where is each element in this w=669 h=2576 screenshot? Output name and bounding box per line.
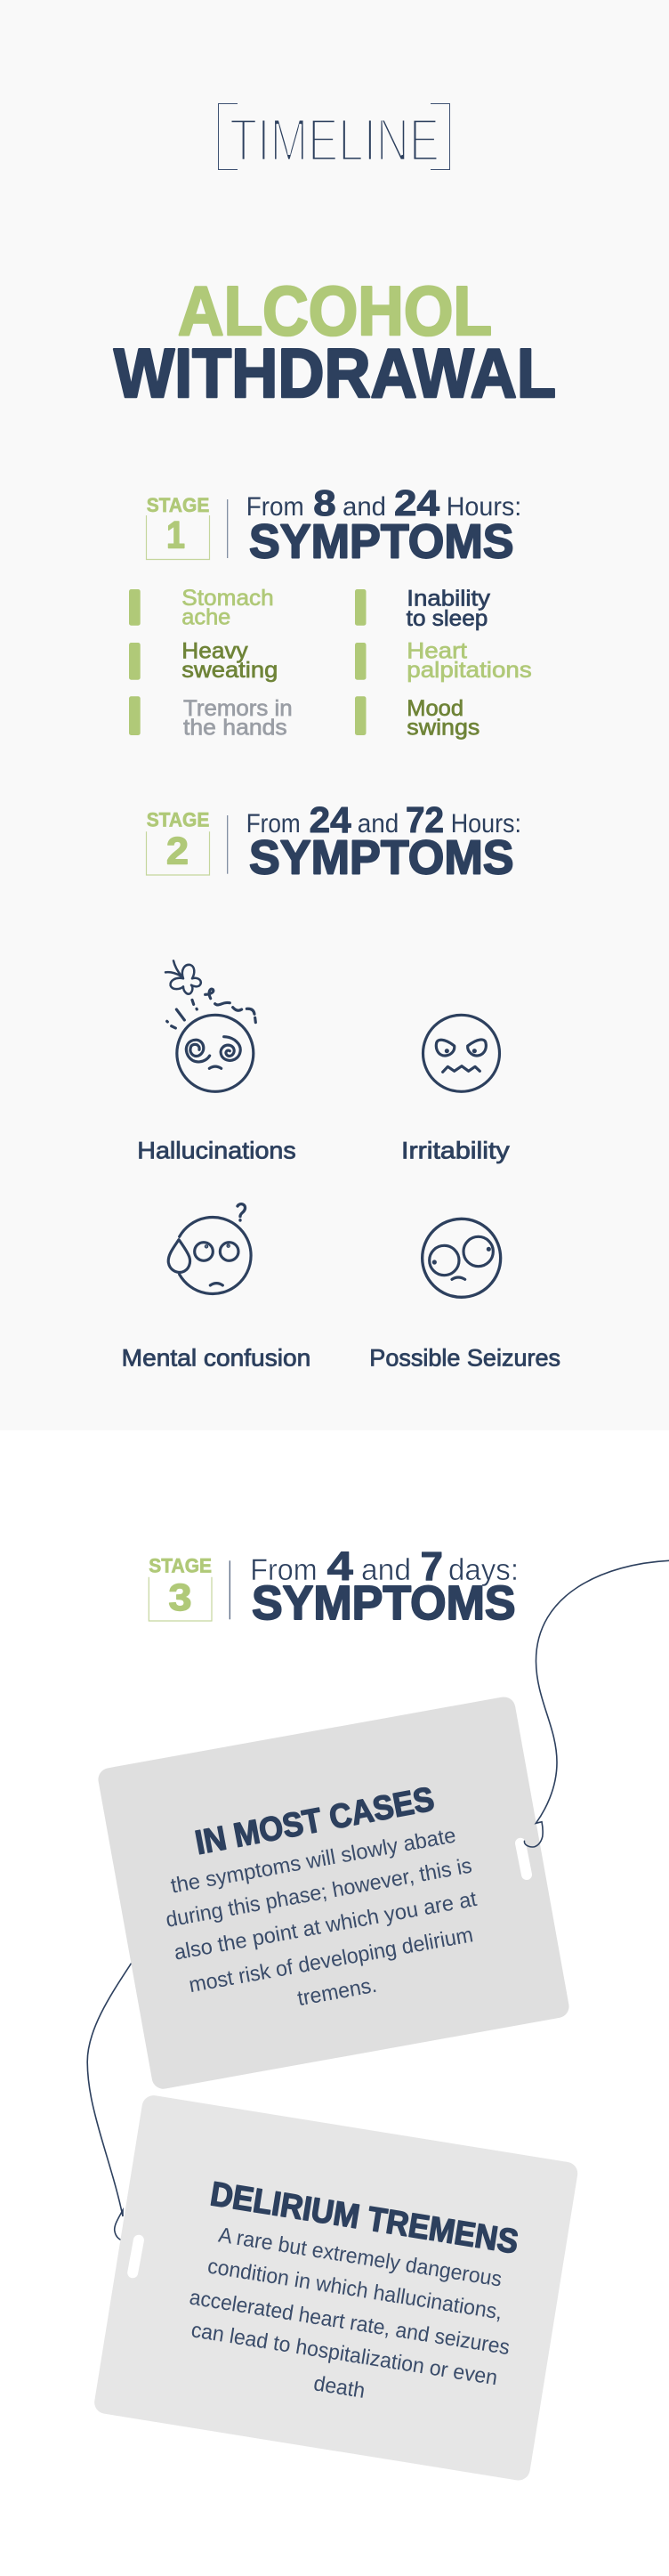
title: WITHDRAWAL — [114, 334, 556, 412]
panel: in most cases card: IN MOST CASES — [192, 1780, 437, 1862]
wire to card 2 — [87, 1964, 135, 2242]
stage 1 symptom list: sweating — [181, 658, 278, 683]
title — [114, 271, 556, 412]
stage 1 header: and — [343, 492, 386, 522]
panel: in most cases card: the symptoms will slowly abate — [169, 1823, 458, 1899]
stage 2 header: 24 — [310, 799, 351, 840]
stage 2 header: SYMPTOMS — [249, 831, 514, 885]
label: irritability: Irritability — [401, 1138, 510, 1164]
stage 3 header: STAGE — [149, 1555, 212, 1577]
stage 1 symptom list: swings — [407, 716, 480, 741]
stage 1 header: SYMPTOMS — [249, 514, 514, 568]
stage 1 header: 1 — [166, 514, 185, 557]
stage 1 symptom list: the hands — [183, 715, 287, 740]
panel: delirium tremens card: condition in which hallucinations, — [206, 2255, 504, 2325]
stage 3 header: From — [250, 1553, 318, 1587]
wire to card 1 — [524, 1560, 669, 1847]
stage 1 symptom list: Mood — [407, 696, 463, 721]
stage 1 header: From — [246, 492, 304, 522]
label: mental confusion: Mental confusion — [122, 1344, 310, 1371]
stage 3 header: 4 — [327, 1543, 353, 1589]
icon: mental confusion face — [168, 1204, 251, 1293]
icon: hallucinations face — [165, 960, 255, 1091]
stage 2 header: STAGE — [147, 809, 209, 831]
stage 1 symptom list: ache — [181, 605, 230, 630]
panel: delirium tremens card: A rare but extremely dangerous — [217, 2224, 504, 2292]
stage 1 symptom list: Inability — [407, 587, 491, 612]
stage 3 header: and — [361, 1553, 411, 1587]
panel: delirium tremens card: death — [312, 2371, 367, 2403]
stage 1 header — [146, 482, 521, 568]
stage 1 symptom list: to sleep — [407, 606, 488, 631]
stage 1 header: 8 — [313, 482, 336, 523]
stage 1 symptom list: Tremors in — [183, 696, 293, 721]
stage 1 symptom list: Heart — [407, 638, 467, 663]
stage 2 header: From — [246, 809, 301, 838]
label: possible seizures: Possible Seizures — [369, 1344, 560, 1371]
stage 3 header: days: — [448, 1553, 519, 1587]
panel: in most cases card: during this phase; however, this is — [164, 1854, 474, 1932]
stage 2 header — [146, 799, 521, 885]
timeline label with brackets: TIMELINE — [230, 107, 439, 174]
panel: delirium tremens card: accelerated heart rate, and seizures — [188, 2286, 512, 2360]
stage 1 header: Hours: — [447, 492, 521, 522]
icon: possible seizures face — [423, 1219, 501, 1297]
stage 2 header: 72 — [406, 799, 444, 840]
stage 2 header: Hours: — [451, 809, 521, 838]
panel: in most cases card: tremens. — [295, 1973, 379, 2011]
panel: delirium tremens card: can lead to hospitalization or even — [189, 2318, 499, 2390]
stage 2 header: and — [358, 809, 399, 838]
stage 3 header: 3 — [169, 1576, 192, 1619]
panel: in most cases card — [96, 1695, 571, 2091]
stage 3 header — [149, 1543, 519, 1630]
stage 1 symptom list: Stomach — [181, 586, 274, 611]
stage 1 symptom list: Heavy — [181, 638, 248, 663]
panel: in most cases card: also the point at which you are at — [173, 1887, 479, 1965]
panel: delirium tremens card: DELIRIUM TREMENS — [208, 2175, 520, 2262]
panel: delirium tremens card — [93, 2094, 579, 2482]
title: ALCOHOL — [178, 271, 492, 350]
label: hallucinations: Hallucinations — [137, 1138, 296, 1164]
stage 1 header: STAGE — [147, 494, 209, 516]
stage 1 symptom list — [129, 586, 532, 741]
stage 1 symptom list: palpitations — [407, 658, 532, 683]
stage 1 header: 24 — [394, 482, 439, 523]
panel: in most cases card: most risk of developing delirium — [187, 1923, 475, 1997]
stage 3 header: SYMPTOMS — [252, 1576, 516, 1630]
icon: irritability face — [423, 1015, 499, 1091]
stage 3 header: 7 — [420, 1543, 443, 1589]
stage 2 header: 2 — [166, 830, 189, 873]
